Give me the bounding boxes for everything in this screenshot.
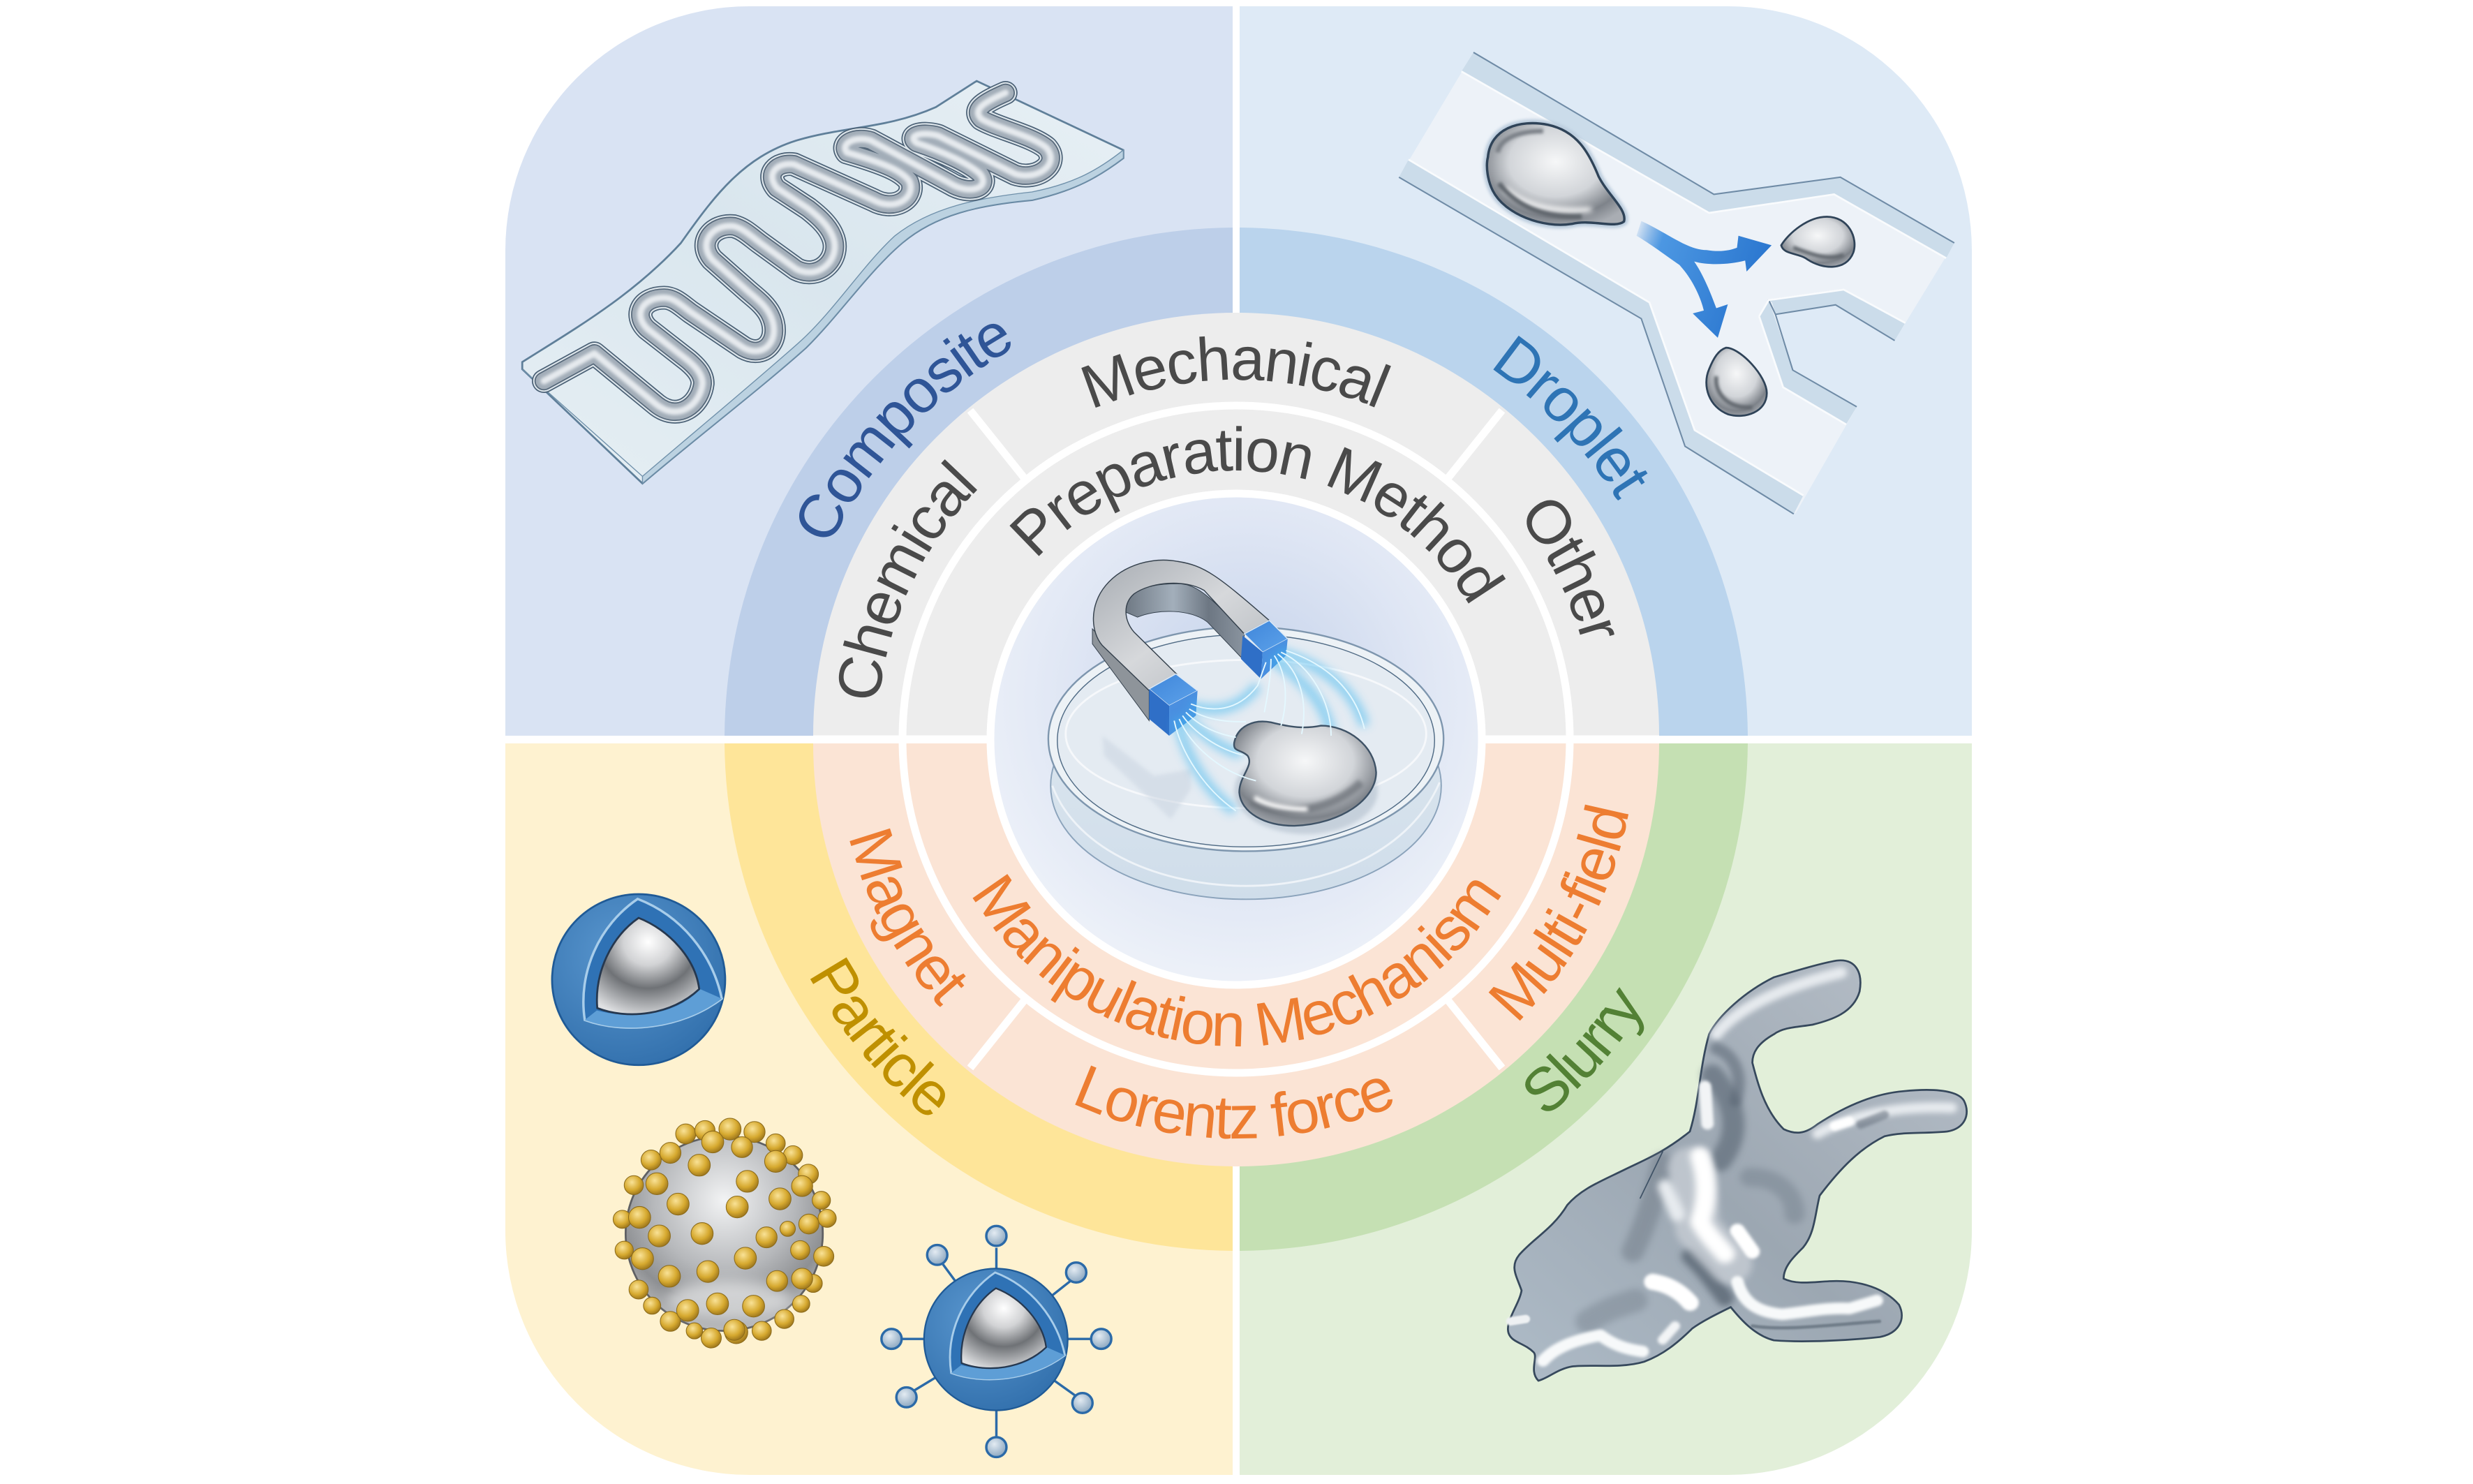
slurry body highlights: [1510, 1075, 1880, 1361]
background panel: particle: [505, 743, 1233, 1475]
label: Particle: Particle: [810, 958, 945, 1115]
central illustration: magnet and liquid metal in dish: [990, 494, 1482, 985]
background panel: composite: [505, 6, 1233, 736]
illustration: particle types: [552, 894, 1111, 1457]
illustration: liquid metal slurry: [1508, 960, 1967, 1381]
outer ring segment: slurry: [1240, 743, 1748, 1251]
label: Manipulation Mechanism: Manipulation Mechanism: [973, 874, 1501, 1047]
channel walls: [1399, 52, 1954, 514]
illustration: Y-junction microchannel splitting droplets: [1399, 52, 1954, 514]
field line glow: [1178, 652, 1365, 811]
outer ring segment: particle: [725, 743, 1233, 1251]
outer ring segment: composite: [725, 228, 1233, 736]
label: Composite: Composite: [799, 324, 1011, 537]
icon: functionalized core-shell particle: [882, 1226, 1111, 1457]
label: Preparation Method: Preparation Method: [1009, 426, 1506, 603]
serpentine tube: [544, 93, 1050, 412]
channel floor: [1399, 52, 1954, 514]
background panel: droplet: [1240, 6, 1972, 736]
field lines: [1174, 651, 1365, 811]
label: Droplet: Droplet: [1494, 335, 1647, 500]
label: Multi-field: Multi-field: [1488, 804, 1629, 1021]
outer ring segment: droplet: [1240, 228, 1748, 736]
background panel: slurry: [1240, 743, 1972, 1475]
droplet: right daughter: [1781, 216, 1855, 267]
label: Magnet: Magnet: [849, 828, 966, 1007]
manipulation ring: [813, 743, 1659, 1166]
icon: horseshoe magnet: [1092, 560, 1288, 736]
label: Lorentz force: Lorentz force: [1075, 1065, 1393, 1139]
illustration: serpentine liquid metal channel in flexible strip: [522, 81, 1123, 484]
label: Chemical: Chemical: [839, 459, 977, 698]
preparation ring: [813, 313, 1659, 736]
icon: liquid metal blob: [1234, 722, 1378, 834]
icon: gold-decorated sphere: [613, 1118, 836, 1348]
label: Other: Other: [1527, 500, 1614, 637]
icon: core-shell particle: [552, 894, 725, 1065]
slurry arm highlights: [1716, 972, 1952, 1134]
droplet: lower daughter: [1707, 348, 1767, 416]
droplet: large parent: [1487, 124, 1624, 225]
icon: petri dish: [1048, 627, 1443, 899]
label: Mechanical: Mechanical: [1081, 336, 1391, 408]
arrow: split flow: [1637, 221, 1772, 338]
label: Slurry: Slurry: [1525, 987, 1644, 1111]
